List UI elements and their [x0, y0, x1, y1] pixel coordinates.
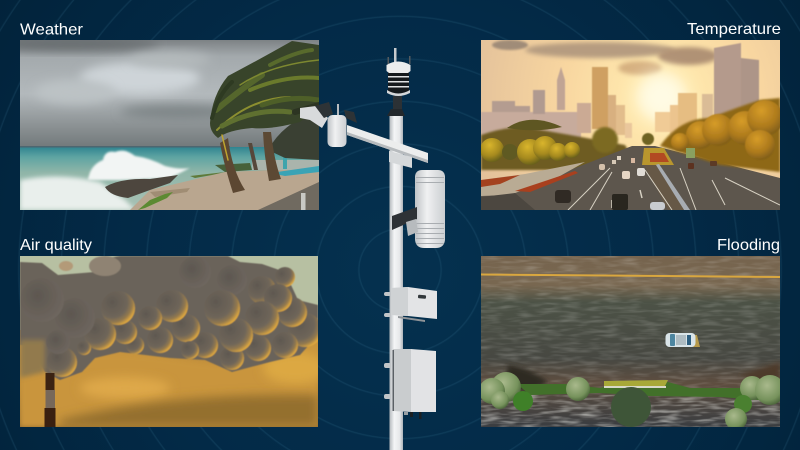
heading: Weather: Weather — [20, 22, 84, 38]
compact weather sensor at top — [386, 48, 410, 116]
crossarm — [347, 125, 428, 168]
heading: Temperature: Temperature — [687, 21, 781, 38]
wind vane and cylindrical sensor on left of arm — [300, 102, 357, 147]
photo: storm over beach with palm trees — [0, 37, 319, 210]
heading: Flooding: Flooding — [717, 237, 780, 254]
palm crowns — [210, 41, 319, 160]
upper enclosure box — [384, 287, 437, 322]
heading: Air quality: Air quality — [20, 237, 92, 254]
icon: car in flood water — [666, 333, 700, 347]
photo: flooded road with car from above — [479, 256, 785, 430]
weather station on pole — [300, 48, 445, 450]
pole — [390, 112, 403, 450]
radiation shield sensor — [392, 170, 445, 248]
lower enclosure box — [384, 349, 436, 419]
chimney — [44, 373, 56, 427]
wave foam — [20, 151, 190, 210]
photo: smokestack emitting clouds at sunset — [20, 256, 327, 427]
smoke plume — [20, 256, 322, 380]
photo: city highway at sunset — [480, 40, 783, 210]
